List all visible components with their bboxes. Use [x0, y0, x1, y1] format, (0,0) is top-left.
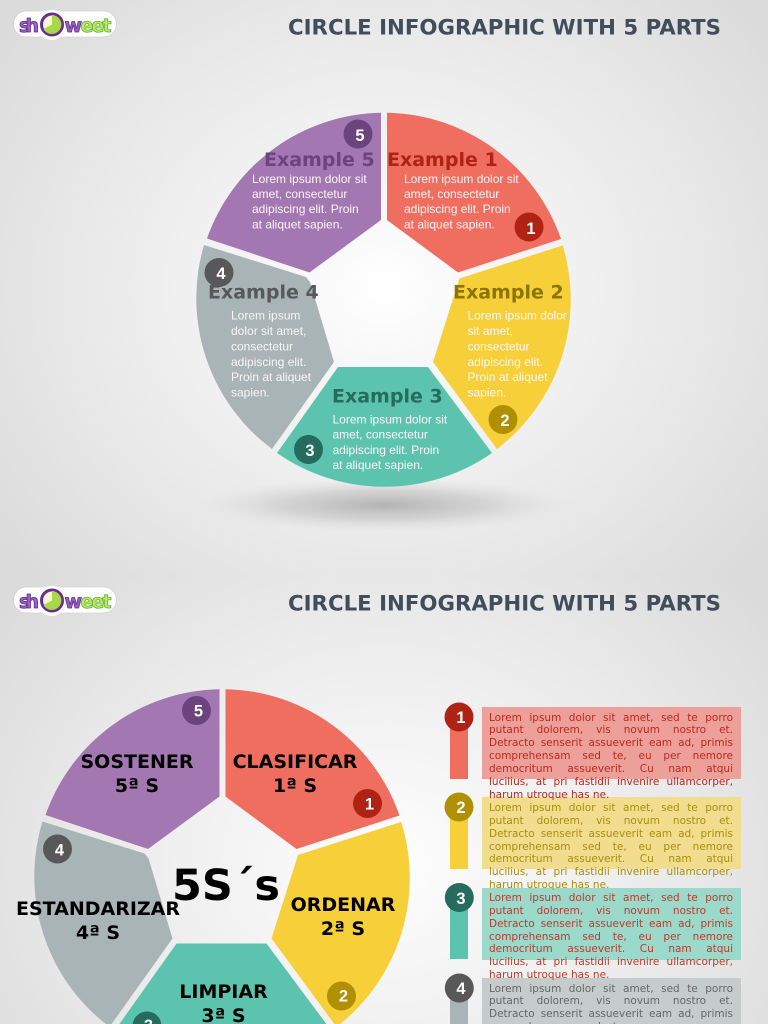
text block 3: harum utroque has ne.: [489, 969, 609, 981]
list badge 2: 2: [456, 799, 466, 817]
segment: ORDENAR: [272, 822, 410, 1024]
text: Example 1: [404, 172, 519, 232]
text: Example 1: Lorem ipsum dolor sit: [404, 172, 519, 186]
center label: 5S´s: 5S´s: [172, 861, 280, 911]
heading: Example 2: Example 2: [453, 282, 564, 304]
text block 4: [489, 982, 733, 1024]
label: SOSTENER: [81, 751, 194, 797]
slide background: top: [0, 0, 768, 576]
text block 2: putant dolorem, vis novum nostro et.: [489, 815, 733, 827]
list badge 2: [444, 792, 474, 822]
badge 2: 2: [339, 988, 348, 1006]
text block 4: putant dolorem, vis novum nostro et.: [489, 995, 733, 1007]
list badge 3: 3: [456, 890, 466, 908]
text block 4: Detracto senserit assueverit eam ad, primis: [489, 1008, 733, 1020]
badge 2: 2: [500, 412, 510, 430]
text: Example 2: Lorem ipsum dolor: [468, 308, 567, 322]
logo: top: [14, 10, 116, 40]
text block 4: Lorem ipsum dolor sit amet, sed te porro: [489, 982, 733, 994]
text: Example 5: Lorem ipsum dolor sit: [252, 172, 367, 186]
label: ORDENAR: ORDENAR: [291, 894, 396, 916]
bar 1: [450, 725, 468, 779]
segment 1: red: [387, 113, 561, 272]
box 3: [482, 888, 741, 960]
bar 3: [450, 905, 468, 959]
text: Example 4: sapien.: [231, 386, 270, 400]
segment 3: teal: [277, 367, 492, 487]
badge 1: 1: [526, 220, 536, 238]
text: Example 4: Proin at aliquet: [231, 370, 312, 384]
text block 1: [489, 712, 733, 801]
text: Example 2: sit amet,: [468, 324, 513, 338]
text: Example 3: Lorem ipsum dolor sit: [332, 412, 448, 426]
text block 1: Detracto senserit assueverit eam ad, primis: [489, 737, 733, 749]
shadow under wheel: [198, 478, 570, 532]
list badge 4: 4: [456, 980, 466, 998]
badge 4: [204, 258, 234, 287]
text: Example 3: at aliquet sapien.: [332, 458, 423, 472]
badge 2: [327, 982, 356, 1010]
label: ESTANDARIZAR: 4ª S: [76, 922, 120, 944]
list badge 1: 1: [456, 709, 466, 727]
text: Example 4: consectetur: [231, 340, 293, 354]
label: CLASIFICAR: 1ª S: [273, 775, 317, 797]
logo: bottom: w: [64, 591, 82, 613]
text: Example 3: [332, 412, 448, 472]
segment: ESTANDARIZAR: [34, 822, 172, 1024]
label: CLASIFICAR: CLASIFICAR: [233, 751, 358, 773]
label: ORDENAR: 2ª S: [321, 918, 365, 940]
segment 5: purple: [207, 113, 381, 272]
text: Example 4: [231, 308, 312, 400]
badge 2: [488, 405, 518, 434]
logo: top: eet: [80, 15, 112, 37]
label: ORDENAR: [291, 894, 396, 940]
text block 3: lucilius, at pri fastidii invenire ullamcorper,: [489, 956, 733, 968]
box 1: [482, 707, 741, 779]
badge 4: [43, 834, 72, 864]
label: CLASIFICAR: [233, 751, 358, 797]
heading: Example 1: Example 1: [387, 149, 498, 171]
badge 3 disc, cut by the frame: [133, 1012, 161, 1024]
list badge 3: [445, 883, 474, 912]
segment: LIMPIAR: [119, 944, 326, 1024]
segment: CLASIFICAR: [226, 689, 400, 849]
bar 4: [450, 996, 468, 1024]
text block 2: harum utroque has ne.: [489, 879, 609, 891]
wheel: top: [196, 113, 571, 487]
text block 3: Detracto senserit assueverit eam ad, primis: [489, 918, 733, 930]
segment: SOSTENER: [46, 689, 220, 849]
text: Example 1: adipiscing elit. Proin: [404, 202, 511, 216]
text block 3: [489, 892, 733, 981]
text: Example 5: adipiscing elit. Proin: [252, 202, 359, 216]
text block 3: Lorem ipsum dolor sit amet, sed te porro: [489, 892, 733, 904]
title: top: CIRCLE INFOGRAPHIC WITH 5 PARTS: [288, 16, 721, 40]
list badge 1: [444, 702, 474, 732]
logo: top: sh: [19, 15, 39, 37]
badge 5: 5: [355, 127, 365, 145]
heading: Example 4: Example 4: [208, 282, 319, 304]
text block 1: lucilius, at pri fastidii invenire ullamcorper,: [489, 776, 733, 788]
text: Example 5: amet, consectetur: [252, 187, 347, 201]
text: Example 5: at aliquet sapien.: [252, 218, 343, 232]
text block 2: democritum assueverit. Cu nam atqui: [489, 853, 733, 865]
label: SOSTENER: 5ª S: [115, 775, 159, 797]
label: SOSTENER: SOSTENER: [81, 751, 194, 773]
logo: bottom: [14, 586, 116, 616]
text: Example 1: at aliquet sapien.: [404, 218, 495, 232]
text block 1: comprehensam sed te, eu per nemore: [489, 750, 733, 762]
text: Example 2: [468, 308, 567, 400]
text: Example 2: consectetur: [468, 340, 530, 354]
text: Example 1: amet, consectetur: [404, 187, 499, 201]
text block 3: democritum assueverit. Cu nam atqui: [489, 943, 733, 955]
bar 2: [450, 815, 468, 869]
text block 1: putant dolorem, vis novum nostro et.: [489, 724, 733, 736]
text block 2: Lorem ipsum dolor sit amet, sed te porro: [489, 802, 733, 814]
heading: Example 3: Example 3: [332, 386, 443, 408]
text block 3: comprehensam sed te, eu per nemore: [489, 931, 733, 943]
text: Example 5: [252, 172, 367, 232]
heading: Example 5: Example 5: [264, 149, 375, 171]
label: LIMPIAR: [179, 981, 268, 1024]
text: Example 3: amet, consectetur: [332, 428, 428, 442]
logo: bottom: eet: [80, 591, 112, 613]
badge 4: 4: [216, 265, 226, 283]
badge 5: [182, 696, 211, 725]
logo: top: w: [64, 15, 82, 37]
slide background: bottom: [0, 576, 768, 1024]
wheel: 5S: [34, 689, 410, 1024]
text: Example 4: Lorem ipsum: [231, 308, 300, 322]
badge 4: 4: [55, 842, 65, 860]
text block 2: lucilius, at pri fastidii invenire ullamcorper,: [489, 866, 733, 878]
text block 1: democritum assueverit. Cu nam atqui: [489, 763, 733, 775]
badge 3: [294, 435, 323, 464]
label: LIMPIAR: LIMPIAR: [179, 981, 268, 1003]
text: Example 2: Proin at aliquet: [468, 370, 548, 384]
badge 1: [353, 789, 382, 818]
text block 3: putant dolorem, vis novum nostro et.: [489, 905, 733, 917]
label: ESTANDARIZAR: [16, 898, 180, 944]
badge 3: 3: [305, 442, 315, 460]
logo: bottom: sh: [19, 591, 39, 613]
segment 2: yellow: [433, 246, 571, 449]
text block 2: comprehensam sed te, eu per nemore: [489, 841, 733, 853]
text: Example 2: sapien.: [468, 386, 506, 400]
badge 5: [344, 120, 372, 148]
text block 2: Detracto senserit assueverit eam ad, primis: [489, 828, 733, 840]
text: Example 4: adipiscing elit.: [231, 355, 306, 369]
box 4: [482, 978, 741, 1024]
text: Example 3: adipiscing elit. Proin: [332, 443, 439, 457]
box 2: [482, 797, 741, 869]
badge 1: [514, 212, 544, 242]
segment 4: gray: [196, 245, 334, 449]
text: Example 2: adipiscing elit.: [468, 355, 543, 369]
badge 1: 1: [365, 796, 374, 814]
title: bottom: CIRCLE INFOGRAPHIC WITH 5 PARTS: [288, 592, 721, 616]
list badge 4: [445, 974, 474, 1002]
text: Example 4: dolor sit amet,: [231, 324, 306, 338]
badge 5: 5: [194, 702, 203, 720]
text block 2: [489, 802, 733, 891]
text block 1: harum utroque has ne.: [489, 789, 609, 801]
label: ESTANDARIZAR: ESTANDARIZAR: [16, 898, 180, 920]
text block 1: Lorem ipsum dolor sit amet, sed te porro: [489, 712, 733, 724]
